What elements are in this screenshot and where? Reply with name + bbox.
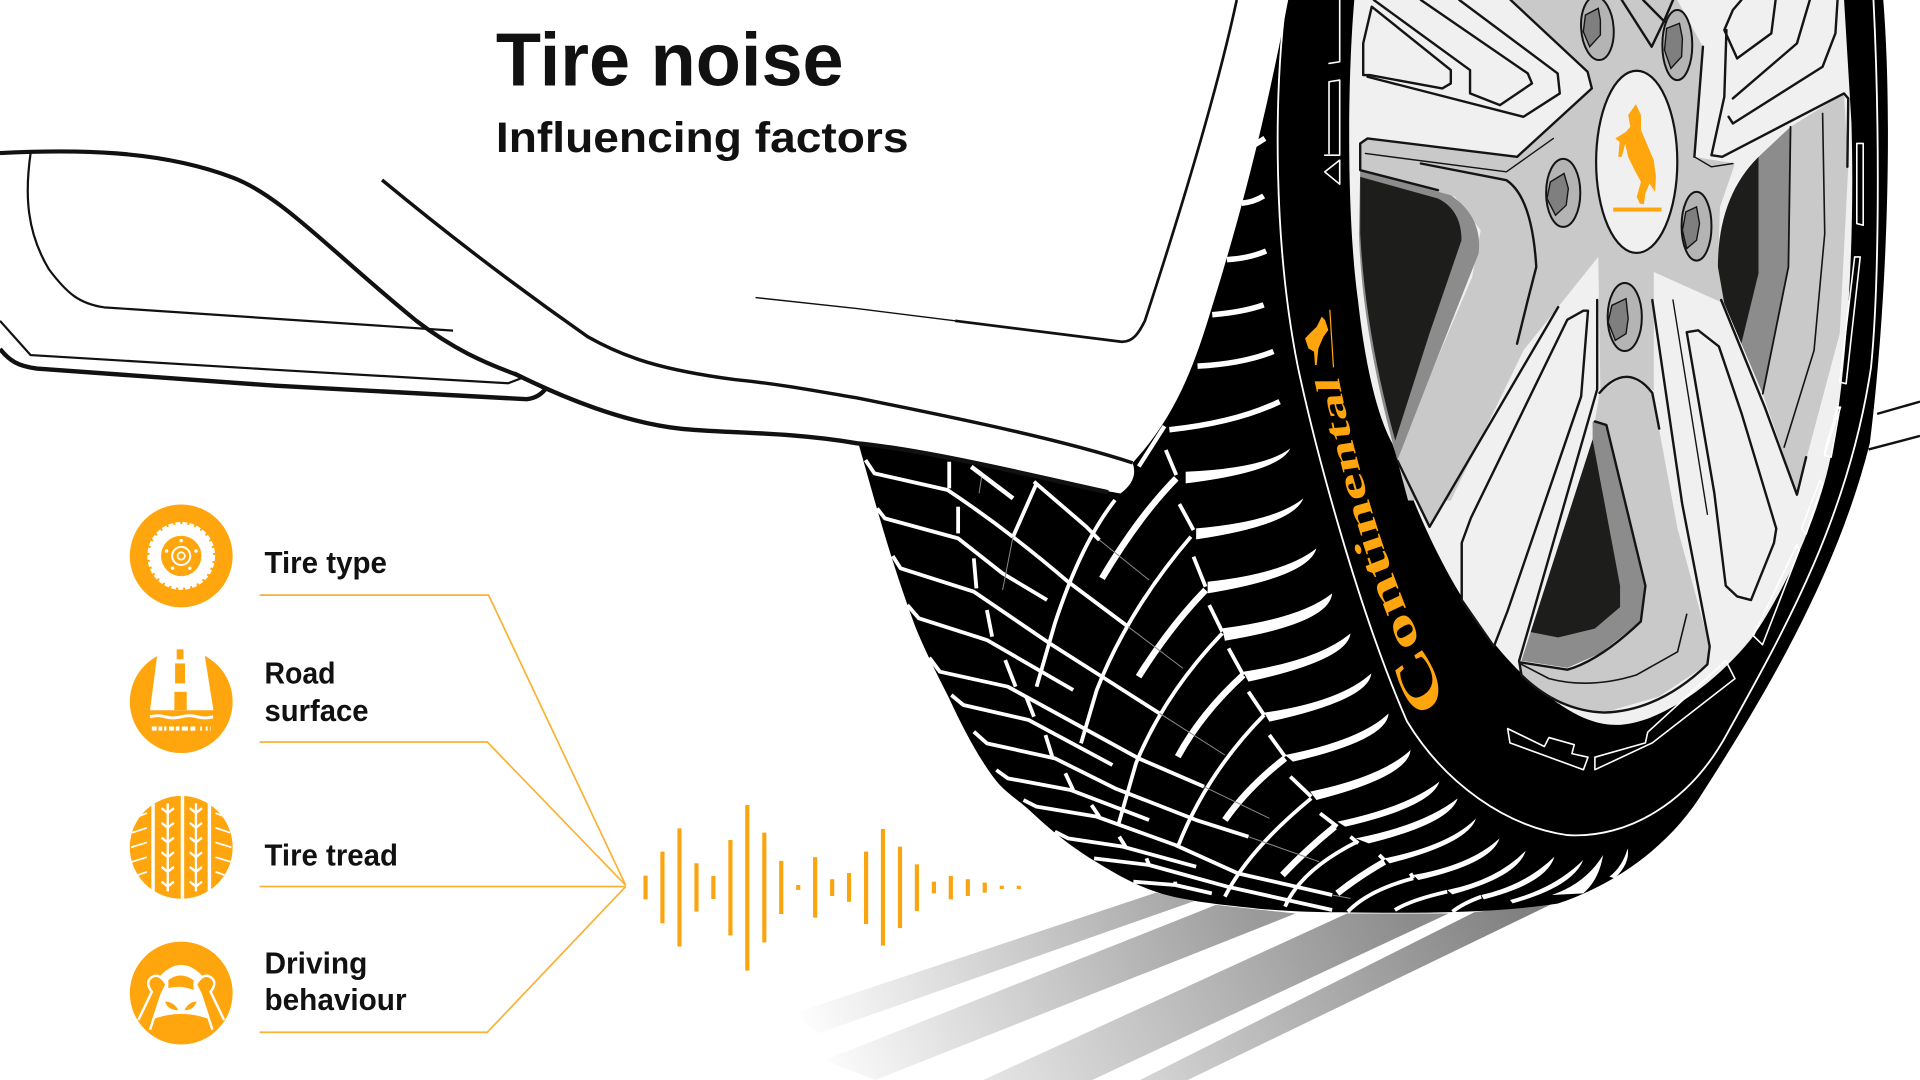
bolt bottom	[1608, 283, 1642, 351]
bolt top right	[1662, 10, 1692, 80]
bolt right	[1682, 192, 1711, 261]
brand name on the sidewall: Continental	[1314, 378, 1438, 710]
hub grey surface	[1360, 0, 1735, 501]
lower window	[1531, 439, 1620, 638]
rim base	[1349, 0, 1852, 725]
icon: driving behaviour	[130, 942, 233, 1044]
door edge thin tail	[756, 298, 955, 321]
left window ring	[1359, 170, 1479, 460]
label: driving behaviour: behaviour	[264, 983, 407, 1017]
label: tire tread: Tire tread	[264, 839, 398, 873]
tread grooves	[866, 448, 1628, 912]
upper tread blocks	[1139, 138, 1280, 467]
label: tire type: Tire type	[264, 546, 387, 580]
stems long	[1013, 483, 1481, 912]
sidewall white contour line	[1278, 0, 1878, 835]
rear bumper outline	[0, 151, 517, 375]
fine sipes	[979, 477, 1350, 898]
bolt left	[1546, 159, 1580, 227]
sidewall markings upper	[1325, 0, 1863, 457]
left window	[1360, 177, 1461, 440]
hub cap horse logo	[1613, 104, 1661, 212]
label: road surface: Road	[264, 656, 336, 690]
junction branches	[1166, 450, 1413, 878]
upper left blades	[1360, 0, 1592, 344]
body character line	[382, 180, 1133, 463]
sidewall markings lower	[1508, 407, 1841, 770]
hub cap	[1596, 71, 1677, 253]
upper wheel details	[1325, 0, 1863, 501]
connector lines	[260, 595, 626, 1032]
stems thick	[1102, 478, 1384, 893]
bolt top left	[1579, 0, 1616, 61]
sill line	[514, 373, 1108, 492]
label: driving behaviour: Driving	[264, 946, 367, 980]
sound waveform	[646, 805, 1019, 971]
brand horse emblem on the sidewall	[1305, 310, 1334, 367]
door edge line	[955, 0, 1237, 342]
right window	[1718, 157, 1759, 344]
bumper inner line	[28, 153, 453, 331]
car body	[0, 0, 1920, 493]
right barrel	[1763, 93, 1848, 494]
icon: tire type	[130, 504, 233, 607]
lower spoke grey	[1519, 373, 1710, 713]
icon: road surface	[130, 647, 233, 753]
lower-left spoke tip	[1397, 368, 1476, 527]
right band	[1741, 127, 1791, 394]
lower wheel details	[1397, 300, 1841, 770]
tire tracks on the road	[792, 893, 1558, 1080]
tire	[858, 0, 1888, 913]
title: Tire noise	[496, 18, 844, 102]
diffuser	[0, 321, 546, 399]
left rows	[866, 460, 1332, 910]
upper right blades	[1622, 0, 1848, 447]
label: road surface: surface	[264, 694, 369, 728]
wheel arch lip band	[514, 346, 1134, 493]
lower window ring	[1521, 421, 1645, 668]
right shoulder blades	[1186, 448, 1628, 903]
wheel rim	[1325, 0, 1863, 770]
icon: tire tread	[130, 796, 233, 900]
far side sill	[1869, 402, 1920, 449]
subtitle: Influencing factors	[496, 114, 909, 162]
tire black body	[858, 0, 1888, 913]
lower outlines	[1397, 300, 1806, 713]
